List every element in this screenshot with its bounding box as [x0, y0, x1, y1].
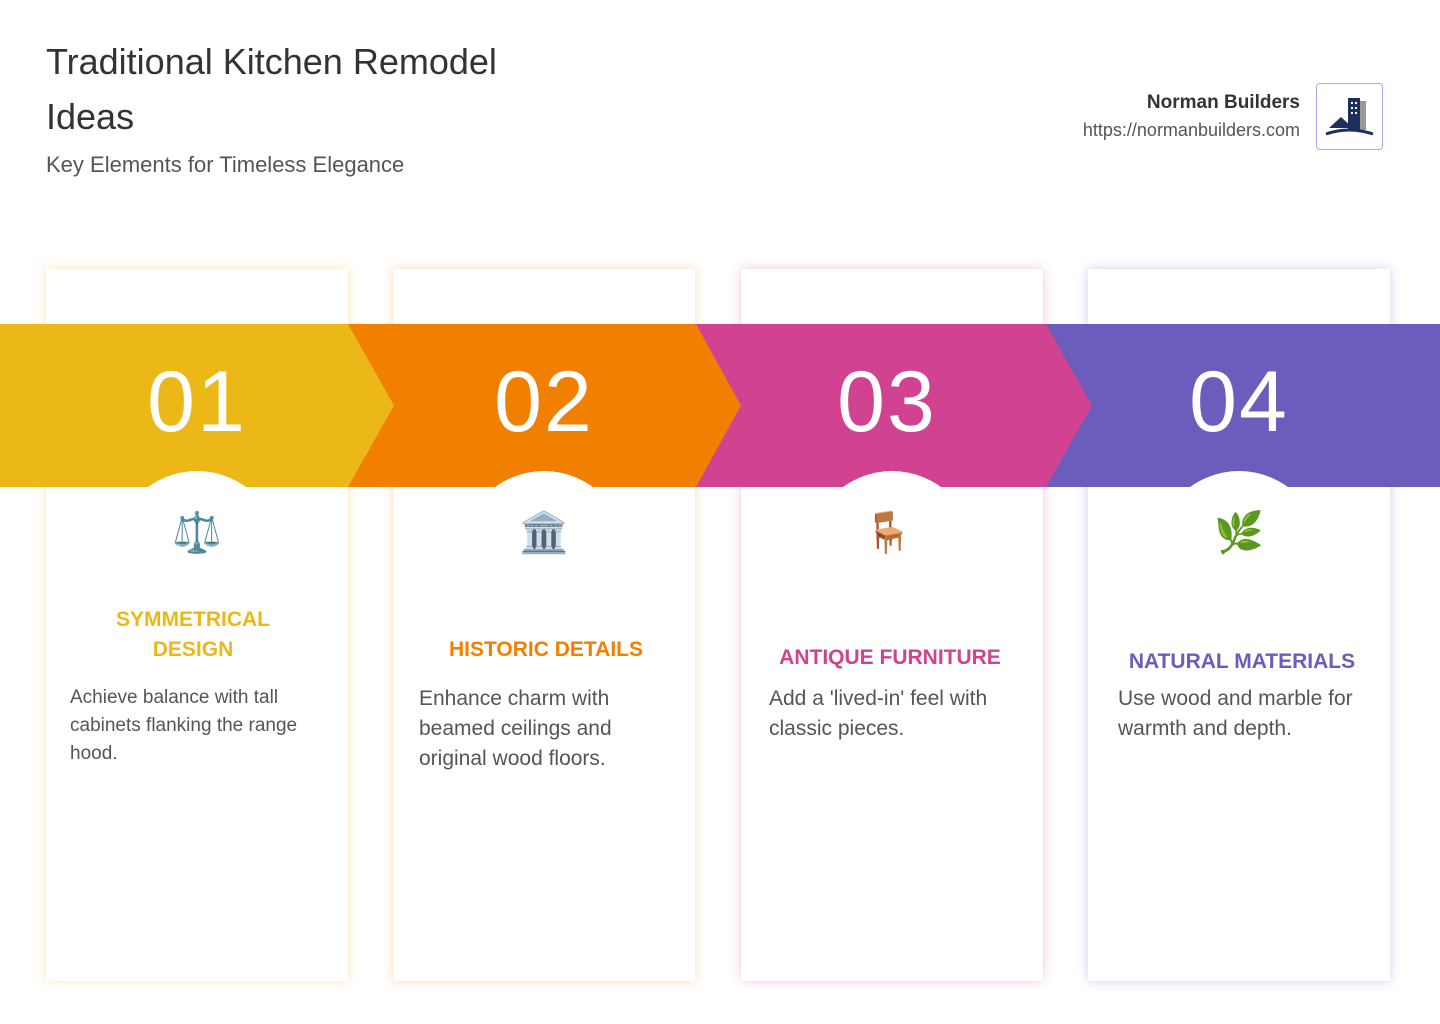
brand	[1083, 83, 1383, 150]
panel 1 text	[116, 608, 270, 661]
text: Use wood and marble for warmth and depth.	[1118, 687, 1353, 740]
text: 🪑	[863, 511, 913, 555]
logo	[1316, 83, 1383, 150]
title: Traditional Kitchen Remodel Ideas	[46, 41, 497, 137]
text: Add a 'lived-in' feel with classic pieces.	[769, 687, 987, 740]
subtitle: Key Elements for Timeless Elegance	[46, 152, 404, 177]
text: 🌿	[1214, 511, 1264, 555]
text: Achieve balance with tall cabinets flanking the range hood.	[70, 687, 297, 764]
text: Enhance charm with beamed ceilings and original wood floors.	[419, 687, 612, 770]
numbers: 01	[147, 354, 247, 450]
panel 1 text: SYMMETRICAL	[116, 608, 270, 631]
panel 3 text: ANTIQUE FURNITURE	[779, 646, 1001, 669]
text: 03	[837, 354, 937, 450]
text: 04	[1189, 354, 1289, 450]
panel 1 text: DESIGN	[153, 638, 233, 661]
arrow band	[0, 324, 1440, 487]
circles	[114, 471, 280, 637]
panel 2 text: HISTORIC DETAILS	[449, 638, 643, 661]
icons: ⚖️	[172, 511, 222, 555]
brand: Norman Builders	[1147, 92, 1300, 113]
text: 🏛️	[519, 511, 569, 555]
text: 02	[494, 354, 594, 450]
brand: https://normanbuilders.com	[1083, 120, 1300, 140]
cards	[46, 269, 348, 981]
panel 4 text: NATURAL MATERIALS	[1129, 650, 1355, 673]
